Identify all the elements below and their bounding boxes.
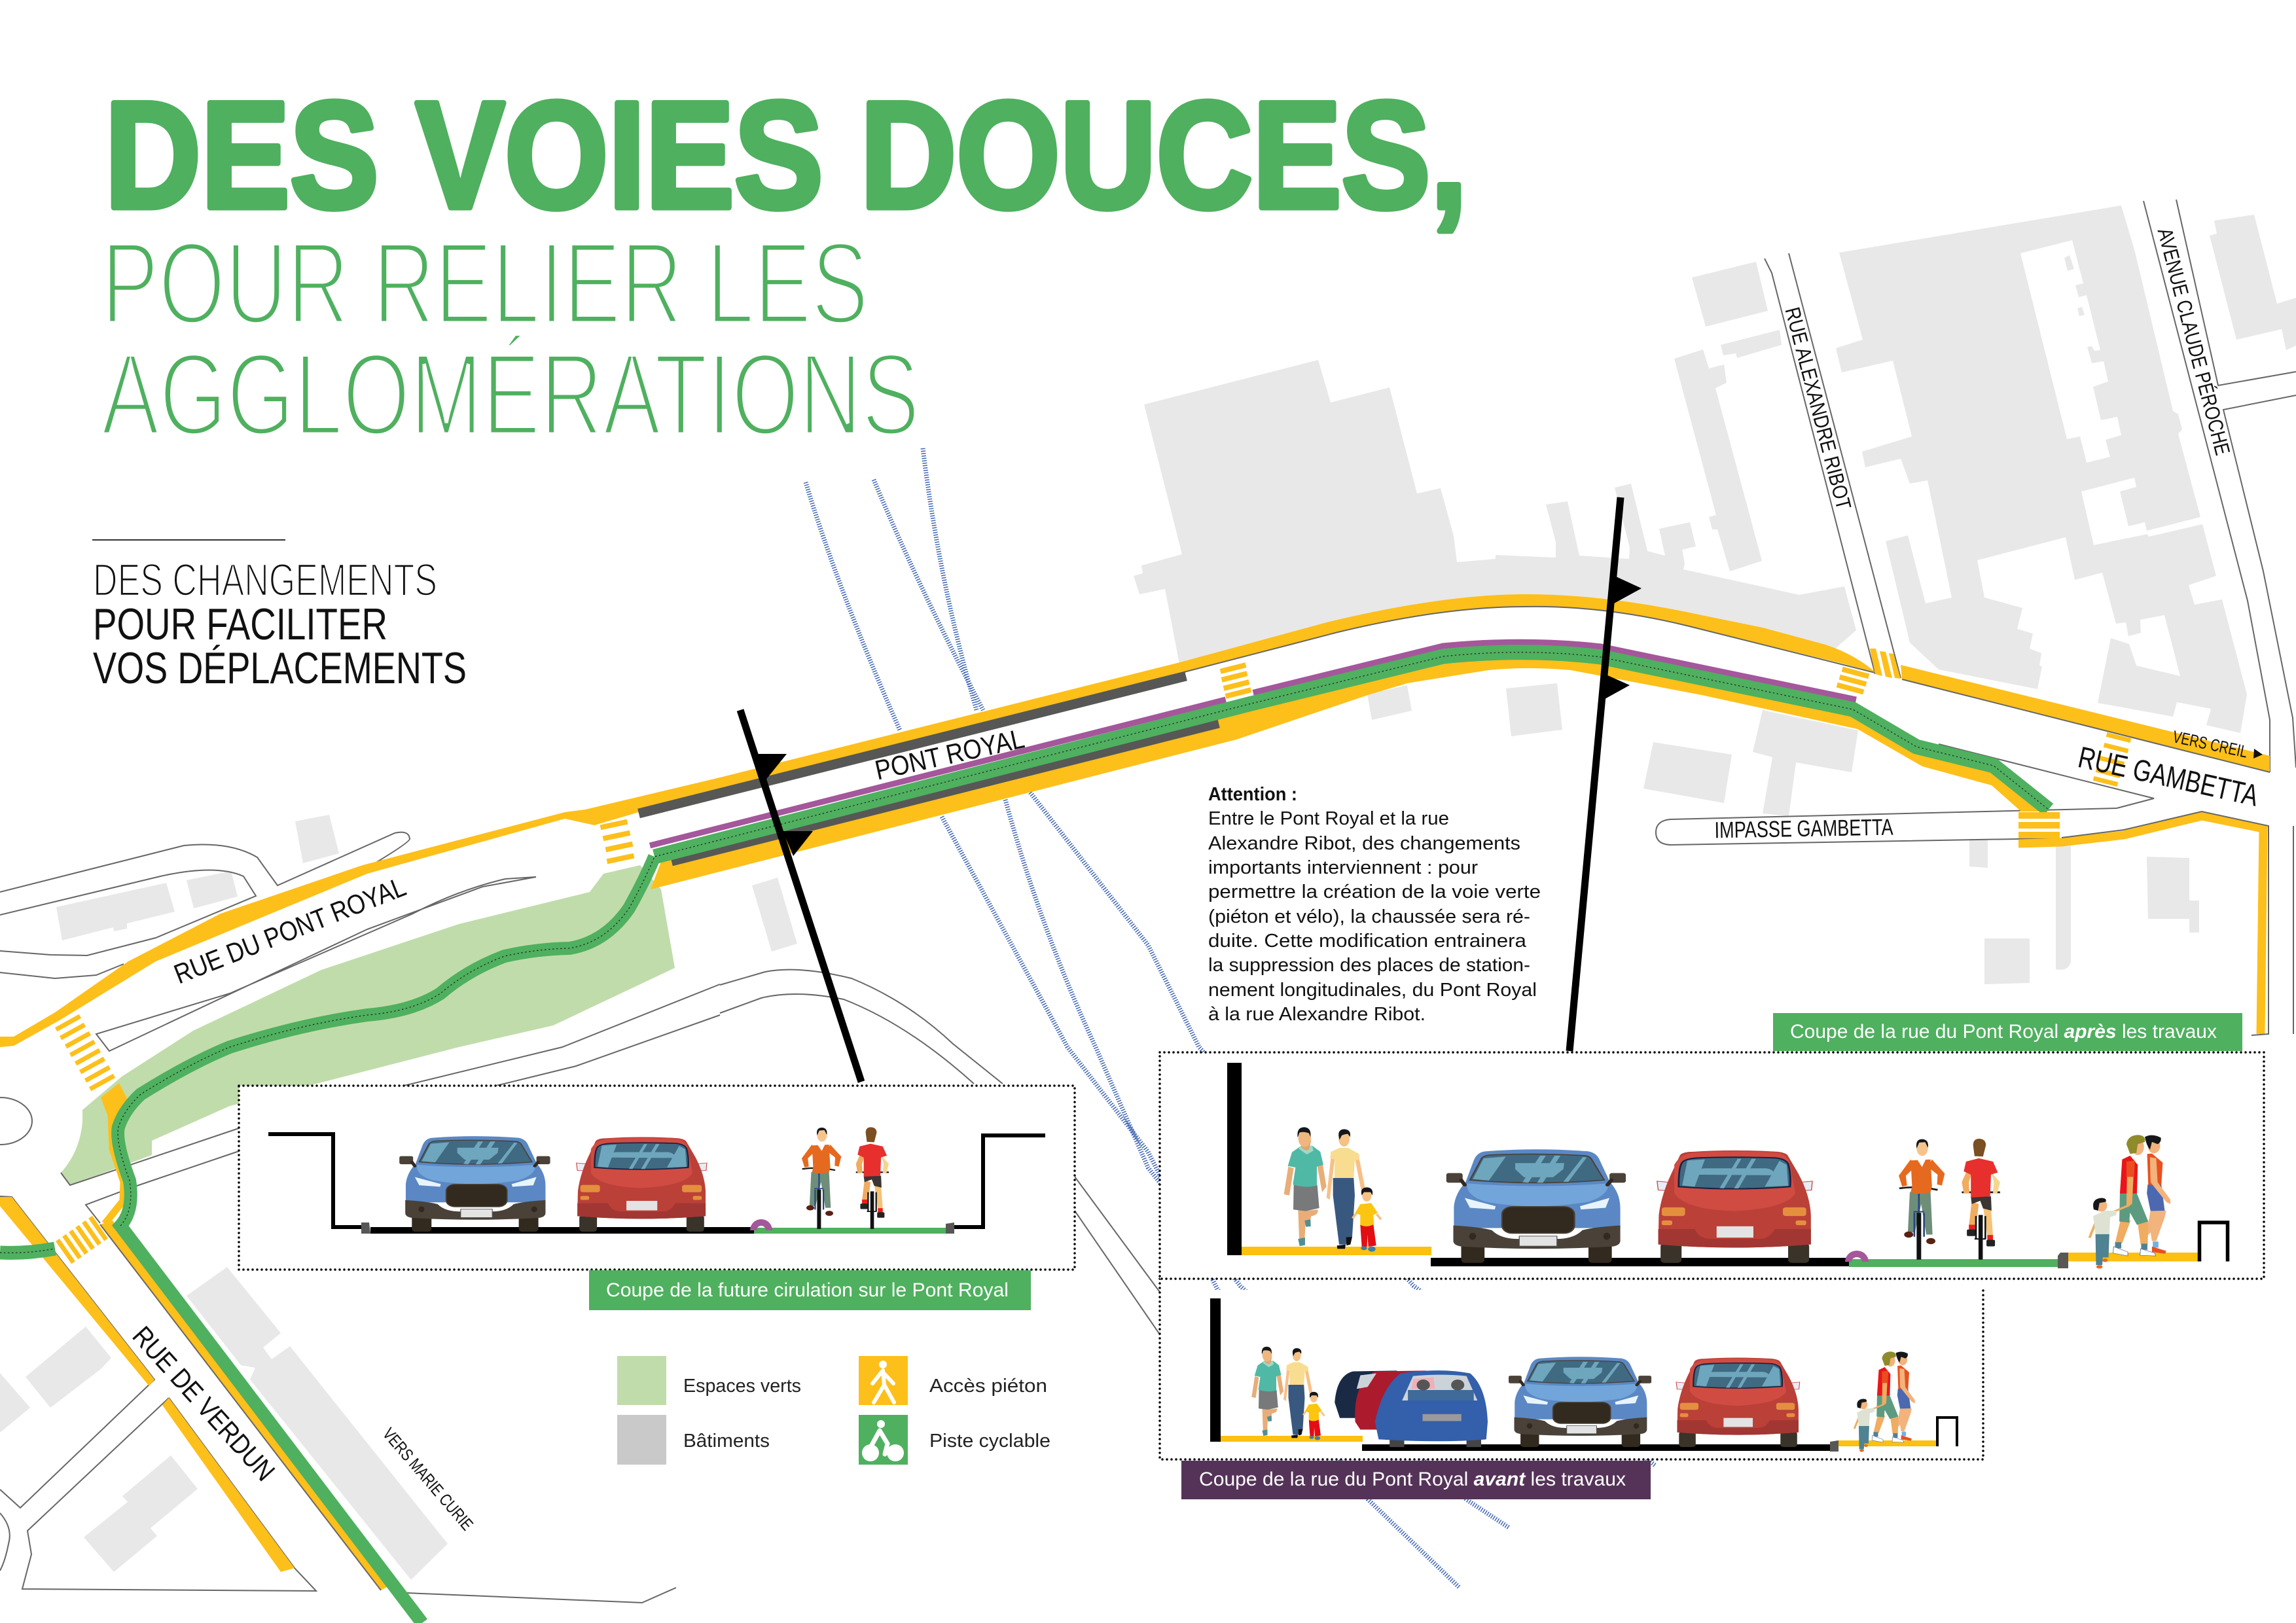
section B: road profile (1227, 1063, 2228, 1268)
map: crossing gap (1224, 686, 1254, 703)
map: curb lines (100, 607, 2270, 1590)
section B: family (1284, 1127, 1381, 1252)
subtitle (93, 554, 467, 693)
map: street labels: VERS MARIE CURIE (379, 1424, 477, 1534)
subtitle: VOS DÉPLACEMENTS (93, 643, 467, 693)
panel: after section (1160, 1052, 2264, 1279)
attention text block: Attention : (1208, 784, 1297, 805)
map: street labels: PONT ROYAL (872, 722, 1027, 786)
attention text block: (piéton et vélo), la chaussée sera ré- (1208, 906, 1530, 927)
legend: green spaces: Espaces verts (683, 1376, 801, 1397)
caption: future section (589, 1270, 1031, 1310)
attention text block: nement longitudinales, du Pont Royal (1208, 980, 1537, 1001)
title: POUR RELIER LES (101, 218, 869, 348)
map: south sidewalk (651, 652, 2049, 889)
map: railway lines (806, 448, 1656, 1587)
section C: parked cars (1335, 1370, 1488, 1447)
title (101, 71, 1467, 459)
subtitle: DES CHANGEMENTS (93, 554, 437, 605)
map: Verdun and roundabout sidewalks (0, 1083, 388, 1590)
map: pedestrian crossings (55, 649, 2131, 1264)
map: green way (0, 652, 2049, 1623)
section C: family (1251, 1347, 1325, 1440)
attention text block: duite. Cette modification entrainera (1208, 931, 1527, 952)
section line A with flags (740, 710, 861, 1082)
map: purple separator (650, 642, 1856, 846)
map: green way centre line (0, 652, 2049, 1253)
title: DES VOIES DOUCES, (105, 71, 1467, 240)
subtitle rule (92, 539, 285, 541)
map: street labels: RUE DU PONT ROYAL (170, 871, 410, 990)
map: street labels: VERS CREIL (2171, 726, 2250, 762)
map: street labels (127, 226, 2263, 1534)
legend: cycle track (859, 1415, 1050, 1465)
caption: future section: Coupe de la future cirulation sur le Pont Royal (606, 1279, 1009, 1301)
attention text block (1208, 784, 1541, 1025)
section B: walkers (2089, 1135, 2170, 1268)
section A: cyclists (802, 1127, 889, 1229)
map: street labels: IMPASSE GAMBETTA (1714, 815, 1893, 843)
section line B with flags (1570, 497, 1641, 1051)
map: Gambetta south sidewalk (2018, 816, 2263, 1034)
attention text block: importants interviennent : pour (1208, 857, 1478, 878)
section C: road profile (1210, 1298, 1957, 1452)
caption: before section: Coupe de la rue du Pont Royal avant les travaux (1199, 1469, 1626, 1490)
subtitle: POUR FACILITER (93, 599, 387, 649)
attention text block: permettre la création de la voie verte (1208, 882, 1541, 902)
panel: before section (1160, 1279, 1983, 1459)
section C: walkers (1854, 1351, 1915, 1452)
legend: buildings (617, 1415, 770, 1465)
section B: cyclists (1899, 1139, 2000, 1260)
section B: cars (1446, 1149, 1812, 1263)
legend: cycle track: Piste cyclable (929, 1431, 1050, 1452)
map: street labels: RUE ALEXANDRE RIBOT (1781, 305, 1856, 512)
attention text block: Entre le Pont Royal et la rue (1208, 808, 1449, 829)
attention text block: la suppression des places de station- (1208, 955, 1530, 976)
legend: pedestrian access: Accès piéton (929, 1376, 1047, 1397)
map: north sidewalk (0, 594, 1875, 1047)
panel: future section (239, 1086, 1075, 1270)
legend: pedestrian access (859, 1356, 1047, 1405)
caption: after section (1773, 1013, 2242, 1051)
section A: road profile (268, 1134, 1045, 1234)
caption: before section (1181, 1461, 1651, 1499)
legend (617, 1356, 1050, 1465)
map: green space (61, 865, 675, 1185)
legend: buildings: Bâtiments (683, 1431, 770, 1452)
map: street labels: AVENUE CLAUDE PÉROCHE (2153, 226, 2234, 457)
map: parking bands (639, 676, 1219, 861)
section A: cars (399, 1136, 707, 1232)
legend: green spaces (617, 1356, 801, 1405)
map: Gambetta south curb line (2062, 812, 2269, 1035)
map: street labels: RUE DE VERDUN (127, 1320, 281, 1487)
attention text block: à la rue Alexandre Ribot. (1208, 1004, 1426, 1025)
title: AGGLOMÉRATIONS (101, 329, 920, 459)
section C: cars (1509, 1357, 1800, 1447)
map: Rue Gambetta north sidewalk (1901, 665, 2270, 772)
attention text block: Alexandre Ribot, des changements (1208, 833, 1520, 854)
caption: after section: Coupe de la rue du Pont Royal après les travaux (1790, 1021, 2217, 1043)
